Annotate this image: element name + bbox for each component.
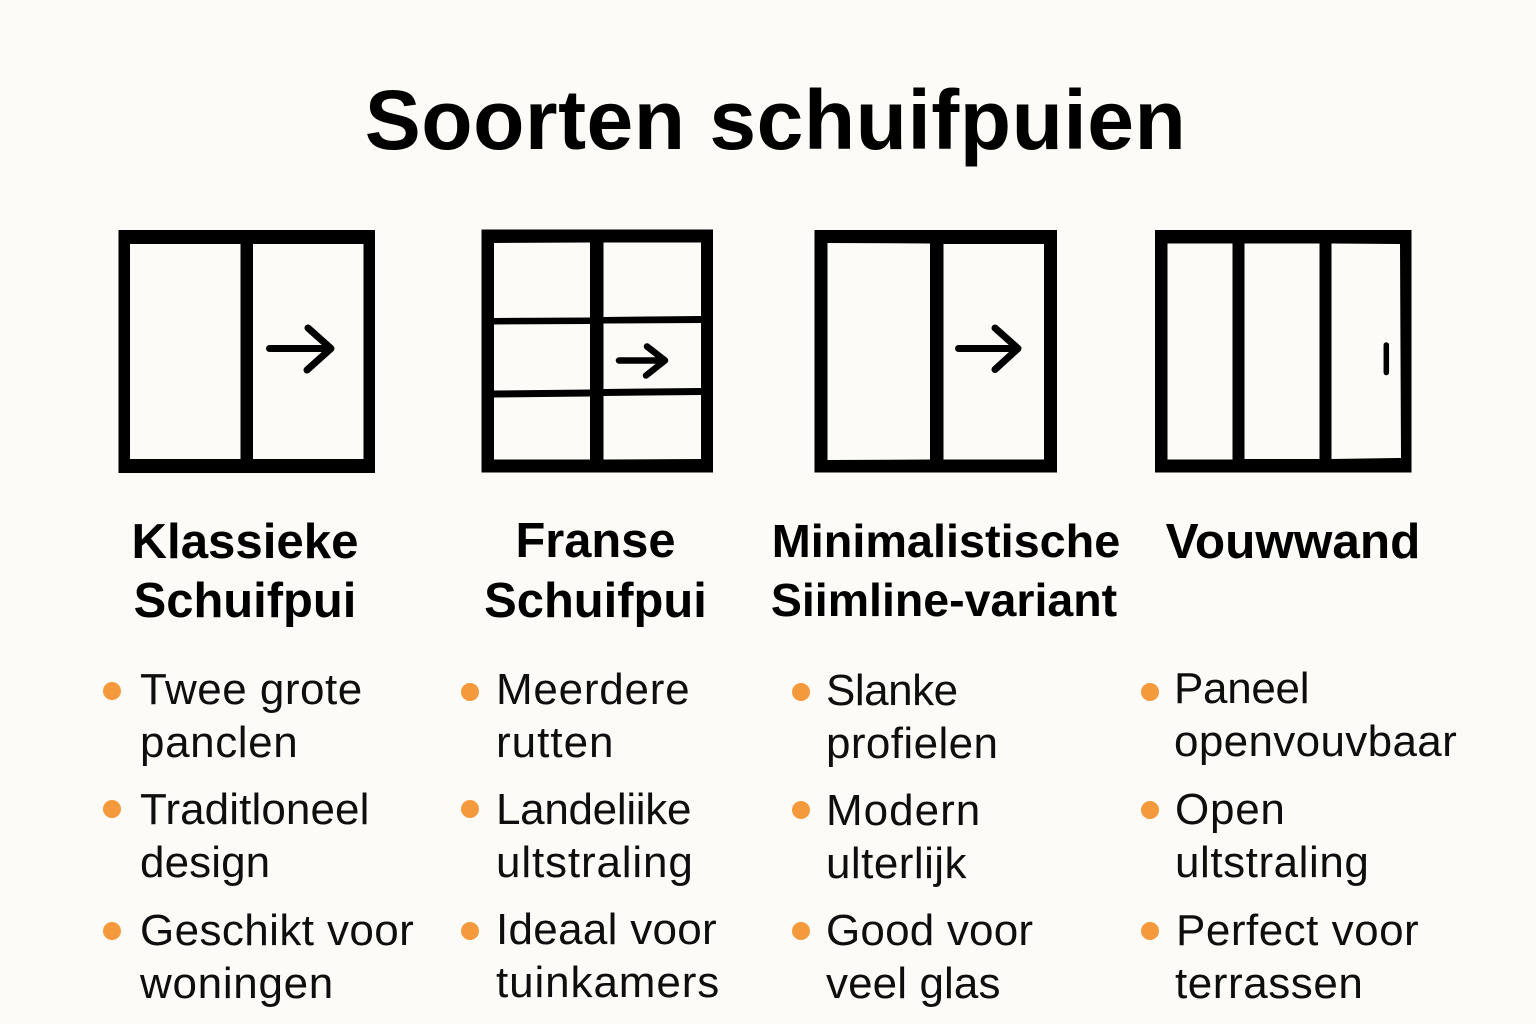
text: Open ultstraling [1175, 785, 1369, 887]
list: Minimalistische Slimline-variant [792, 666, 1033, 1008]
icon: folding wall [1155, 230, 1412, 472]
column heading: Minimalistische Slimline-variant: Siimline-variant [771, 574, 1117, 626]
icon: French sliding door [482, 230, 713, 472]
text: Twee grote panclen [140, 665, 363, 767]
text: Slanke profielen: Slanke [826, 666, 958, 715]
bullet 2 [792, 800, 810, 818]
column heading: Franse Schuifpui [484, 514, 707, 628]
list: Franse Schuifpui [461, 665, 720, 1007]
text: Open ultstraling: ultstraling [1175, 838, 1369, 887]
text: Geschikt voor woningen: woningen [140, 959, 334, 1008]
text: Ideaal voor tuinkamers [496, 905, 720, 1007]
column heading: Franse Schuifpui: Schuifpui [484, 574, 707, 628]
bullet 1 [103, 682, 121, 700]
text: Twee grote panclen: panclen [140, 718, 298, 767]
icon: classic sliding door [118, 230, 375, 473]
text: Twee grote panclen: Twee grote [140, 665, 363, 714]
bullet 2 [103, 800, 121, 818]
text: Traditloneel design: Traditloneel [140, 785, 369, 834]
text: Paneel openvouvbaar: openvouvbaar [1174, 717, 1457, 766]
text: Modern ulterlijk [826, 786, 981, 888]
text: Ideaal voor tuinkamers: tuinkamers [496, 958, 720, 1007]
text: Traditloneel design [140, 785, 369, 887]
text: Modern ulterlijk: Modern [826, 786, 981, 835]
bullet 3 [1141, 922, 1159, 940]
text: Geschikt voor woningen: Geschikt voor [140, 906, 414, 955]
list: Klassieke Schuifpui [103, 665, 414, 1008]
column heading: Klassieke Schuifpui: Schuifpui [134, 574, 356, 628]
text: Paneel openvouvbaar: Paneel [1174, 664, 1309, 713]
text: Geschikt voor woningen [140, 906, 414, 1008]
icon: minimalist slimline door [814, 230, 1057, 472]
text: Perfect voor terrassen: Perfect voor [1176, 906, 1419, 955]
text: Good voor veel glas: veel glas [826, 959, 1001, 1008]
text: Landeliike ultstraling [496, 785, 694, 887]
text: Slanke profielen [826, 666, 998, 768]
text: Meerdere rutten: Meerdere [496, 665, 690, 714]
column heading: Franse Schuifpui: Franse [515, 514, 676, 568]
text: Traditloneel design: design [140, 838, 270, 887]
column heading: Klassieke Schuifpui: Klassieke [132, 514, 358, 569]
text: Landeliike ultstraling: ultstraling [496, 838, 694, 887]
title: Soorten schuifpuien [365, 73, 1186, 167]
column heading: Minimalistische Slimline-variant [771, 515, 1120, 626]
text: Meerdere rutten [496, 665, 690, 767]
text: Open ultstraling: Open [1175, 785, 1286, 834]
text: Perfect voor terrassen [1175, 906, 1419, 1008]
bullet 1 [461, 682, 479, 700]
list: Vouwwand [1141, 664, 1457, 1008]
text: Modern ulterlijk: ulterlijk [826, 839, 967, 888]
text: Good voor veel glas: Good voor [826, 906, 1033, 955]
text: Ideaal voor tuinkamers: Ideaal voor [496, 905, 717, 954]
bullet 3 [103, 922, 121, 940]
bullet 2 [461, 800, 479, 818]
bullet 1 [792, 683, 810, 701]
bullet 3 [461, 922, 479, 940]
column heading: Klassieke Schuifpui [132, 514, 358, 628]
column heading: Minimalistische Slimline-variant: Minimalistische [772, 515, 1120, 567]
text: Slanke profielen: profielen [826, 719, 998, 768]
text: Paneel openvouvbaar [1174, 664, 1457, 766]
bullet 1 [1141, 683, 1159, 701]
bullet 3 [792, 922, 810, 940]
text: Meerdere rutten: rutten [496, 718, 615, 767]
text: Landeliike ultstraling: Landeliike [496, 785, 691, 834]
text: Perfect voor terrassen: terrassen [1175, 959, 1363, 1008]
text: Good voor veel glas [826, 906, 1033, 1008]
bullet 2 [1141, 800, 1159, 818]
column heading: Vouwwand: Vouwwand [1166, 514, 1420, 569]
